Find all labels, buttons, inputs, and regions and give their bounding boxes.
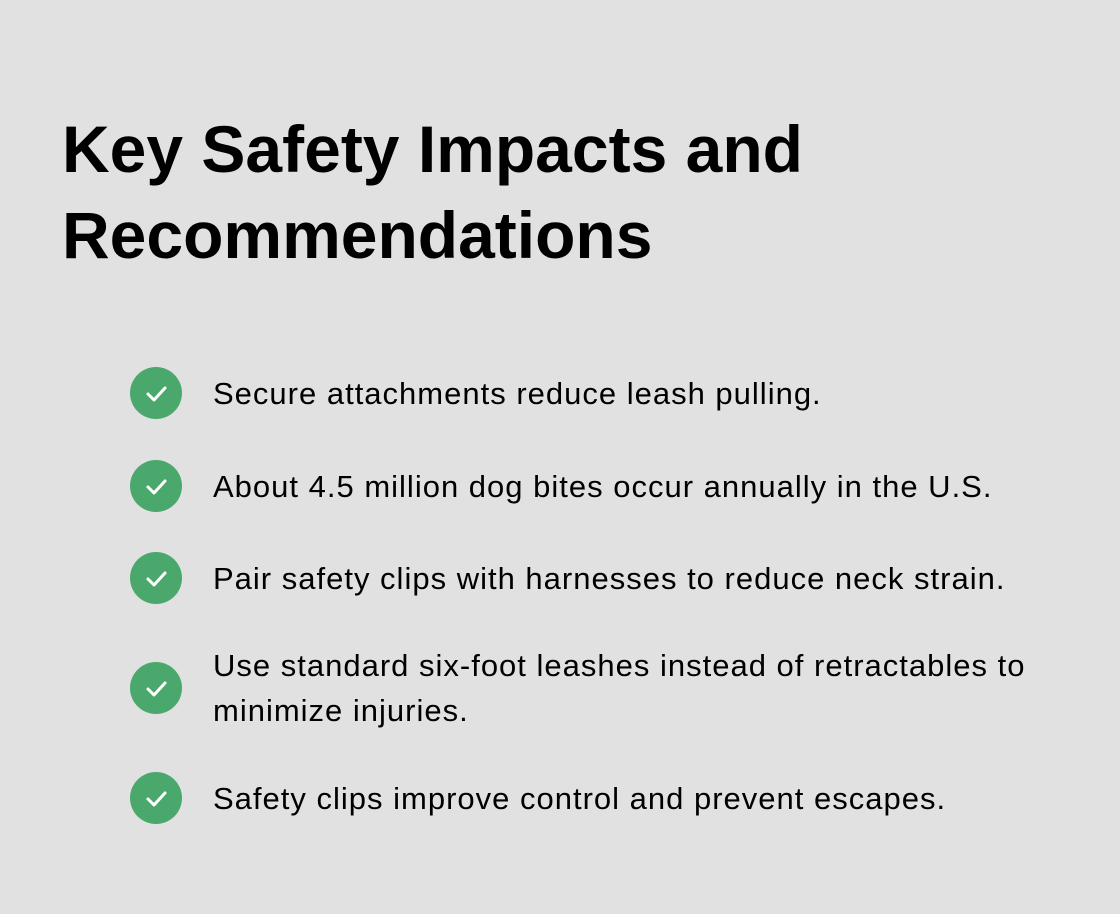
text	[213, 648, 1025, 728]
icon: check	[130, 460, 182, 512]
text: Pair safety clips with harnesses to reduce neck strain.	[213, 561, 1005, 596]
item 3	[130, 552, 1005, 604]
title: Key Safety Impacts and	[62, 112, 803, 186]
text: minimize injuries.	[213, 693, 469, 728]
icon: check	[130, 367, 182, 419]
icon: check	[130, 772, 182, 824]
icon: check	[130, 662, 182, 714]
text: Secure attachments reduce leash pulling.	[213, 376, 822, 411]
text: About 4.5 million dog bites occur annually in the U.S.	[213, 469, 992, 504]
text: Safety clips improve control and prevent escapes.	[213, 781, 946, 816]
title	[62, 112, 803, 272]
title: Recommendations	[62, 198, 652, 272]
text: Use standard six-foot leashes instead of retractables to	[213, 648, 1025, 683]
item 1	[130, 367, 822, 419]
item 2	[130, 460, 992, 512]
item 4	[130, 648, 1025, 728]
item 5	[130, 772, 946, 824]
icon: check	[130, 552, 182, 604]
